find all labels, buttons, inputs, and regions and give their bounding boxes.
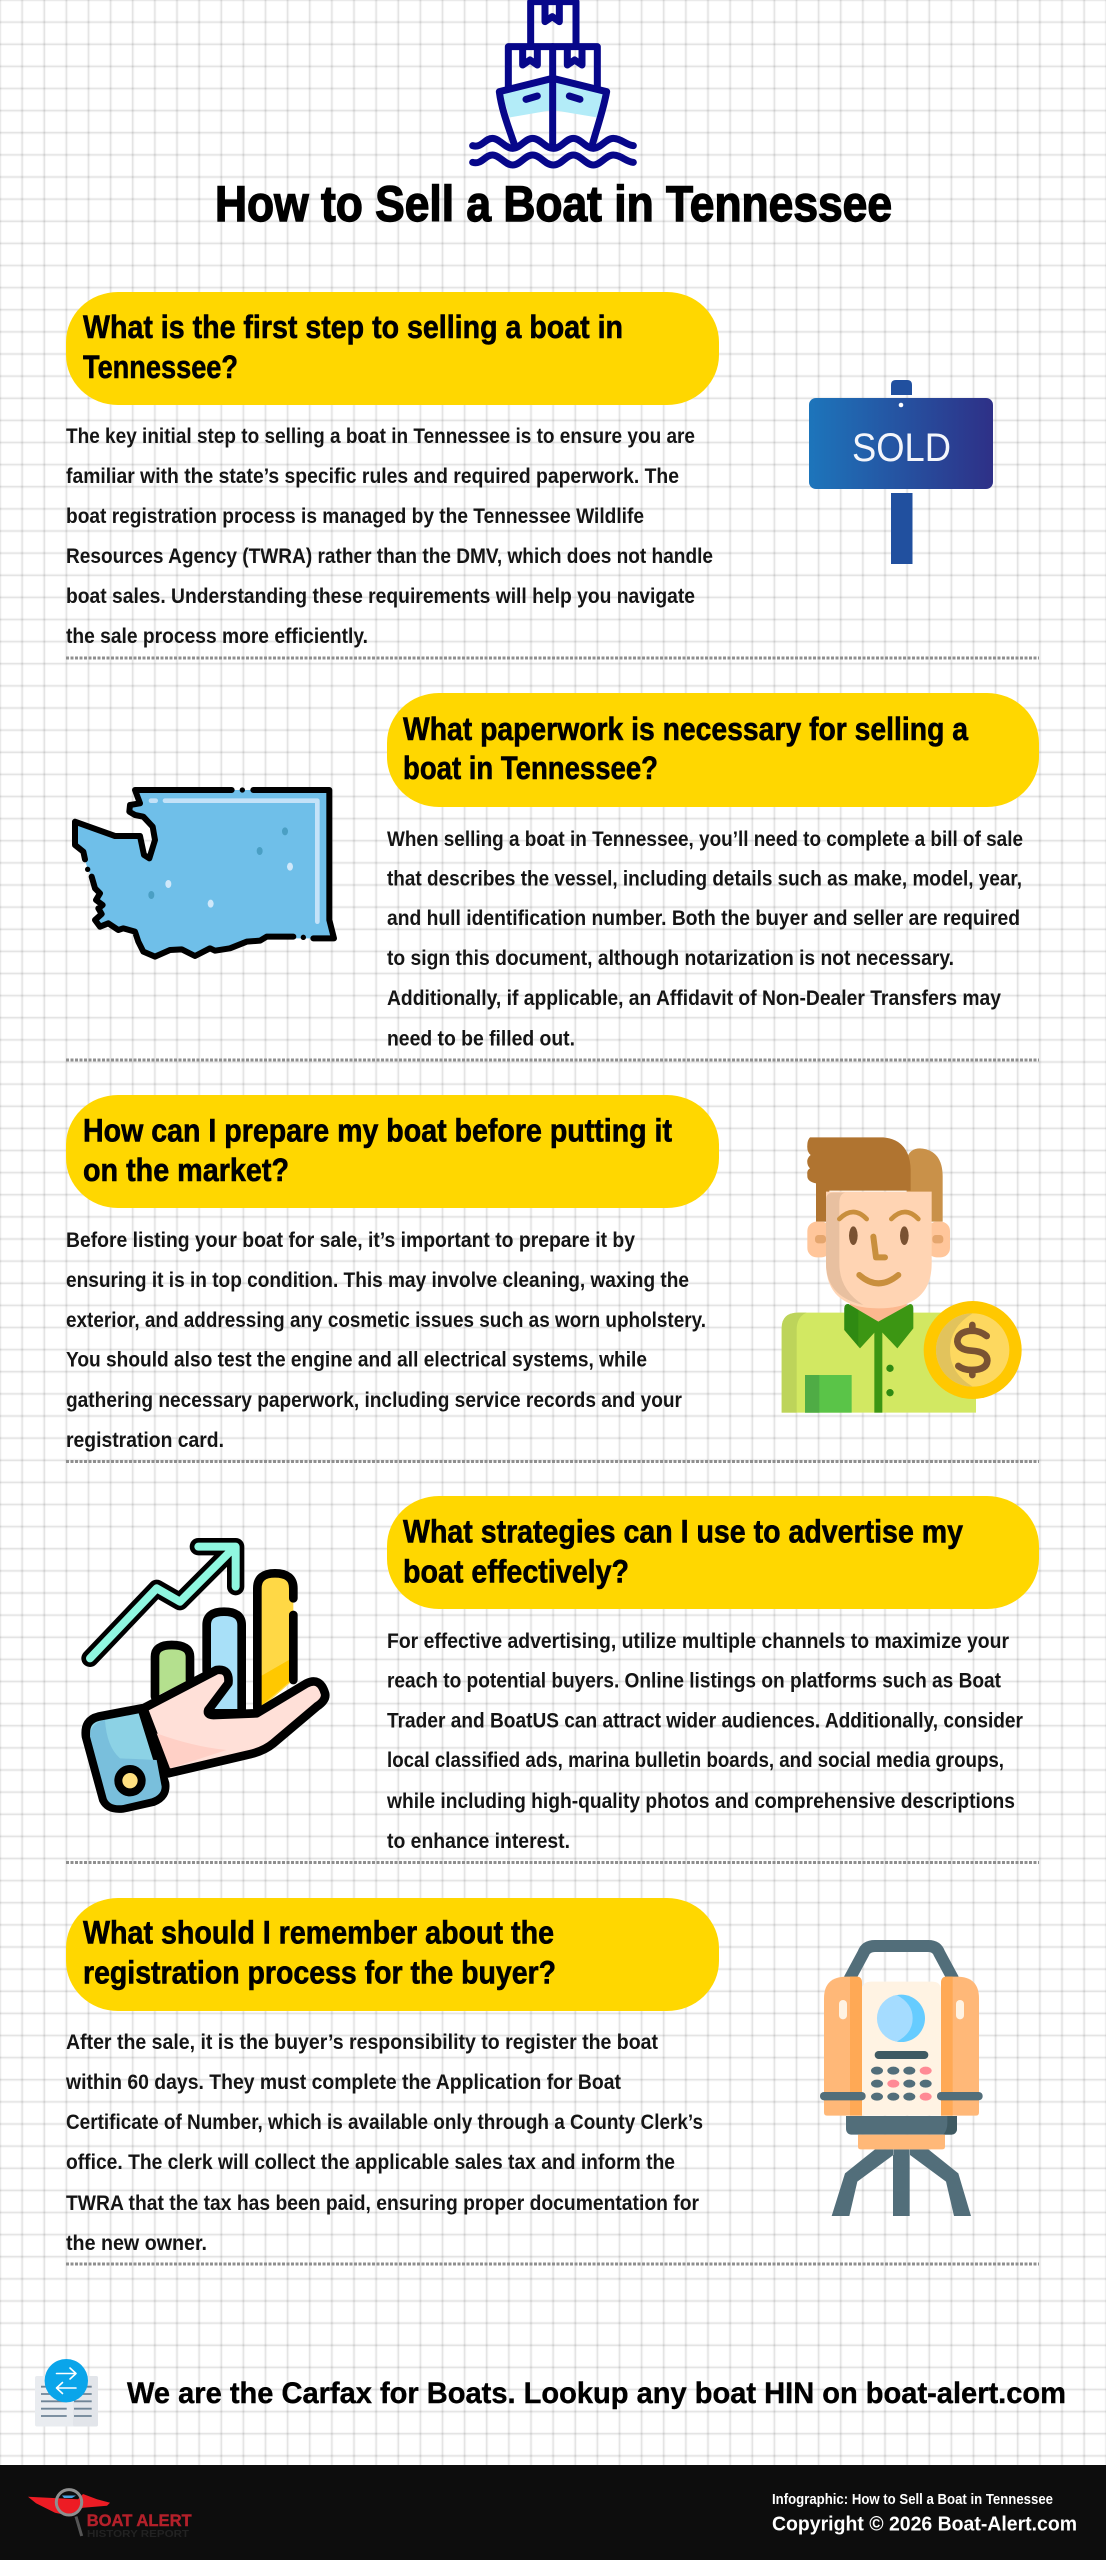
text block: first step: boat registration process is managed by the Tennessee Wildlife xyxy=(66,505,644,528)
heading pill: advertising xyxy=(387,1496,1039,1609)
heading pill: paperwork: boat in Tennessee? xyxy=(403,750,658,786)
panel: advertising xyxy=(86,1496,1039,1853)
icon: document with exchange arrows xyxy=(35,2359,98,2426)
text block: paperwork: When selling a boat in Tennessee, you’ll need to complete a bill of sale xyxy=(387,828,1023,851)
footer band xyxy=(0,2465,1106,2560)
icon: sold sign: SOLD xyxy=(852,426,951,470)
text block: registration: TWRA that the tax has been paid, ensuring proper documentation for xyxy=(66,2192,699,2215)
heading pill: paperwork: What paperwork is necessary for selling a xyxy=(403,711,968,747)
icon: surveying total station xyxy=(820,1946,983,2216)
heading pill: first step: What is the first step to selling a boat in xyxy=(83,309,623,345)
heading pill: prepare: on the market? xyxy=(83,1152,289,1188)
heading pill: first step: Tennessee? xyxy=(83,349,238,385)
text block: first step: familiar with the state’s specific rules and required paperwork. The xyxy=(66,465,679,488)
heading pill: prepare xyxy=(66,1095,719,1208)
text block: registration: the new owner. xyxy=(66,2232,207,2255)
footer credit: Copyright © 2026 Boat-Alert.com xyxy=(772,2514,1077,2536)
text block: advertising: local classified ads, marina bulletin boards, and social media groups, xyxy=(387,1749,1004,1772)
panel: prepare xyxy=(66,1095,1022,1452)
logo: Boat Alert xyxy=(28,2490,192,2540)
text block: prepare: Before listing your boat for sale, it’s important to prepare it by xyxy=(66,1229,635,1252)
text block: registration xyxy=(65,2031,703,2255)
text block: paperwork: need to be filled out. xyxy=(387,1028,575,1050)
text block: registration: office. The clerk will collect the applicable sales tax and inform the xyxy=(66,2151,675,2174)
heading pill: advertising: boat effectively? xyxy=(403,1554,629,1590)
heading pill: registration xyxy=(66,1898,719,2011)
text block: first step xyxy=(66,425,713,648)
text block: prepare: You should also test the engine and all electrical systems, while xyxy=(66,1348,647,1372)
text block: paperwork: that describes the vessel, including details such as make, model, year, xyxy=(387,868,1022,890)
text block: advertising: For effective advertising, utilize multiple channels to maximize your xyxy=(387,1630,1009,1653)
text block: first step: The key initial step to selling a boat in Tennessee is to ensure you are xyxy=(66,425,695,448)
text block: advertising: to enhance interest. xyxy=(387,1830,570,1853)
panel: paperwork xyxy=(75,693,1039,1050)
text block: prepare: registration card. xyxy=(66,1429,224,1452)
icon: cargo ship xyxy=(473,2,633,165)
tagline: We are the Carfax for Boats. Lookup any boat HIN on boat-alert.com xyxy=(127,2377,1066,2410)
logo: Boat Alert: BOAT ALERT xyxy=(87,2511,192,2530)
panel: registration xyxy=(65,1898,983,2255)
icon: sold sign xyxy=(809,380,993,564)
logo: Boat Alert: HISTORY REPORT xyxy=(87,2528,190,2540)
title: How to Sell a Boat in Tennessee xyxy=(215,176,892,232)
text block: prepare: gathering necessary paperwork, including service records and your xyxy=(66,1389,682,1412)
text block: registration: Certificate of Number, which is available only through a County Clerk’s xyxy=(66,2111,703,2134)
icon: seller with coin xyxy=(782,1137,1022,1413)
text block: first step: the sale process more efficiently. xyxy=(66,625,368,648)
heading pill: advertising: What strategies can I use to advertise my xyxy=(403,1514,963,1550)
panel: first step xyxy=(66,292,993,648)
text block: prepare: exterior, and addressing any cosmetic issues such as worn upholstery. xyxy=(66,1309,706,1332)
text block: first step: boat sales. Understanding these requirements will help you navigate xyxy=(66,585,695,608)
text block: paperwork: and hull identification number. Both the buyer and seller are required xyxy=(387,907,1020,930)
icon: hand holding growth chart xyxy=(86,1547,325,1809)
text block: advertising xyxy=(386,1630,1023,1853)
icon: state map xyxy=(75,787,334,957)
text block: paperwork: to sign this document, although notarization is not necessary. xyxy=(387,947,954,970)
heading pill: first step xyxy=(66,292,719,405)
text block: prepare xyxy=(66,1229,706,1452)
text block: registration: After the sale, it is the buyer’s responsibility to register the boat xyxy=(66,2031,658,2054)
text block: prepare: ensuring it is in top condition. This may involve cleaning, waxing the xyxy=(66,1269,689,1292)
text block: paperwork: Additionally, if applicable, an Affidavit of Non-Dealer Transfers may xyxy=(387,987,1001,1010)
text block: registration: within 60 days. They must complete the Application for Boat xyxy=(65,2071,621,2094)
footer credit xyxy=(772,2491,1077,2536)
footer credit: Infographic: How to Sell a Boat in Tennessee xyxy=(772,2491,1053,2508)
text block: advertising: Trader and BoatUS can attract wider audiences. Additionally, consider xyxy=(387,1710,1023,1732)
heading pill: registration: What should I remember about the xyxy=(83,1914,554,1950)
heading pill: paperwork xyxy=(387,693,1039,807)
text block: first step: Resources Agency (TWRA) rather than the DMV, which does not handle xyxy=(66,545,713,568)
heading pill: registration: registration process for the buyer? xyxy=(83,1954,556,1990)
heading pill: prepare: How can I prepare my boat before putting it xyxy=(83,1112,672,1148)
text block: advertising: reach to potential buyers. Online listings on platforms such as Boat xyxy=(387,1670,1001,1692)
text block: paperwork xyxy=(387,828,1023,1050)
text block: advertising: while including high-quality photos and comprehensive descriptions xyxy=(386,1790,1015,1813)
